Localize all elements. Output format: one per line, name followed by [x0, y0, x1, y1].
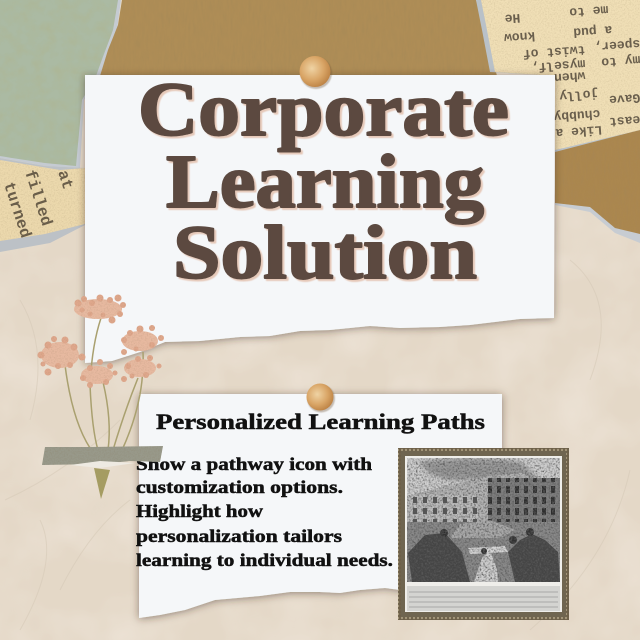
panel: newspaper scrap, top right: when	[553, 68, 586, 85]
panel: newspaper scrap, left: turned	[0, 180, 34, 240]
panel: newspaper scrap, top right: my to	[601, 52, 640, 70]
panel: newspaper scrap, left: at	[53, 168, 76, 192]
text block: description: Show a pathway icon with	[136, 454, 372, 474]
panel: newspaper scrap, top right: Gave	[608, 90, 640, 107]
panel: lower note card	[136, 394, 560, 618]
panel: newspaper scrap, top right: speer,	[593, 36, 640, 54]
flower heads	[38, 294, 164, 388]
title: Solution	[173, 211, 477, 295]
heading: Personalized Learning Paths: Personalized Learning Paths	[156, 409, 486, 434]
panel: newspaper scrap, top right: east	[609, 112, 640, 129]
panel: newspaper scrap, top right: chubby	[553, 106, 601, 124]
engraving sky	[407, 458, 560, 528]
engraving crowd	[407, 520, 560, 582]
icon: gold pin, title note	[300, 56, 332, 89]
panel: newspaper scrap, top right: me to	[569, 2, 609, 20]
illustration: framed engraving	[398, 448, 569, 620]
text block: description	[136, 454, 393, 570]
panel: newspaper scrap, top right: twist of	[522, 42, 586, 61]
engraving building	[407, 473, 560, 540]
frame	[398, 448, 569, 620]
icon: gold pin, lower note	[306, 384, 335, 412]
panel: newspaper scrap, left: filled	[20, 168, 55, 228]
engraving smoke	[420, 458, 540, 480]
text block: description: learning to individual needs.	[136, 550, 393, 570]
panel: newspaper scrap, top right: a pud	[573, 22, 613, 40]
flower stem base	[94, 468, 110, 499]
panel: main title note	[85, 68, 555, 363]
flower stems	[65, 318, 143, 450]
text block: description: customization options.	[136, 477, 343, 497]
engraving caption	[407, 586, 560, 611]
panel: newspaper scrap, top right: know	[503, 28, 536, 45]
title	[138, 68, 509, 295]
tape strip	[42, 446, 163, 468]
title: Learning	[166, 140, 484, 224]
panel: newspaper scrap, top right: jolly	[559, 86, 599, 104]
text block: description: personalization tailors	[136, 526, 342, 546]
panel: newspaper scrap, top right: myself,	[530, 56, 586, 75]
panel: newspaper scrap, top right: Like a	[555, 122, 603, 140]
text block: description: Highlight how	[136, 501, 263, 521]
panel: brown kraft paper, right	[555, 125, 640, 243]
illustration: pressed flowers with tape	[38, 294, 164, 499]
panel: newspaper scrap, top right	[476, 0, 640, 152]
panel: green torn paper	[0, 0, 121, 168]
panel: newspaper scrap, left	[0, 158, 85, 252]
panel: newspaper scrap, top right: He	[504, 10, 521, 26]
title: Corporate	[138, 68, 509, 152]
panel: brown kraft paper, top	[100, 0, 497, 76]
